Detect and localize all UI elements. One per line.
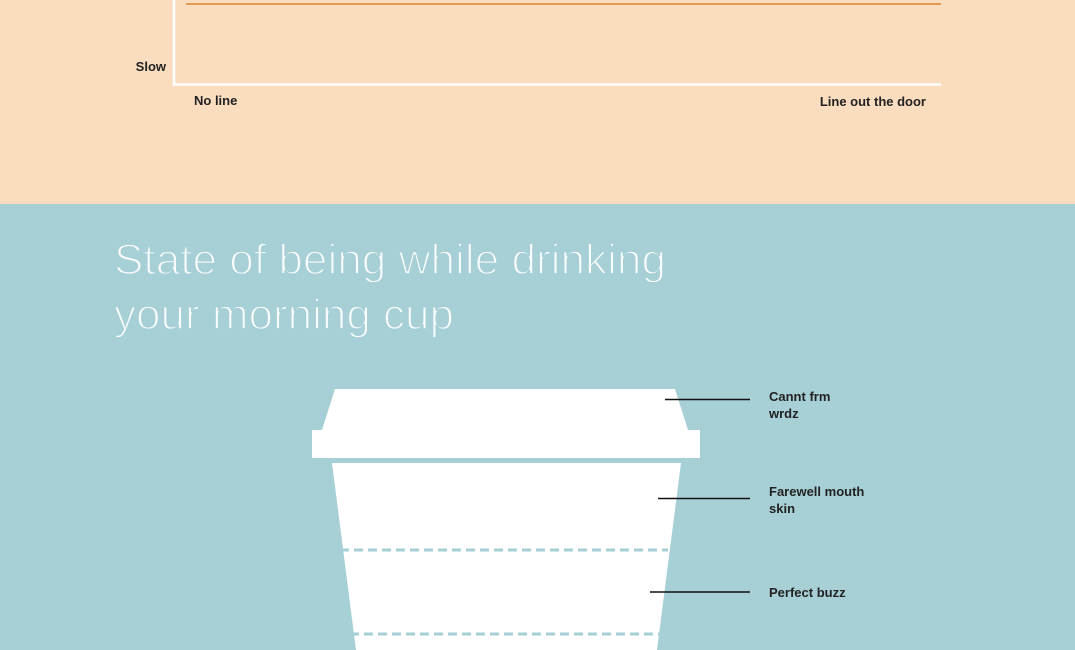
heading: State of being while drinking [114,236,666,284]
icon: coffee cup [312,389,700,650]
y-axis label: Slow [136,59,167,74]
callout: Cannt frm wrdz: Cannt frm [769,389,830,404]
heading [114,236,666,339]
callout: Cannt frm wrdz [665,389,830,421]
heading: your morning cup [114,291,454,339]
x-axis label right: Line out the door [820,94,926,109]
x-axis label left: No line [194,93,237,108]
callout: Perfect buzz: Perfect buzz [769,585,846,600]
callout: Farewell mouth skin: Farewell mouth [769,484,864,499]
chart data line [186,3,941,5]
chart axes [174,0,941,84]
panel: wait line chart [0,0,1075,204]
callout: Cannt frm wrdz: wrdz [768,406,799,421]
callout: Farewell mouth skin [658,484,864,516]
panel: state of being [0,204,1075,650]
callout: Farewell mouth skin: skin [769,501,795,516]
